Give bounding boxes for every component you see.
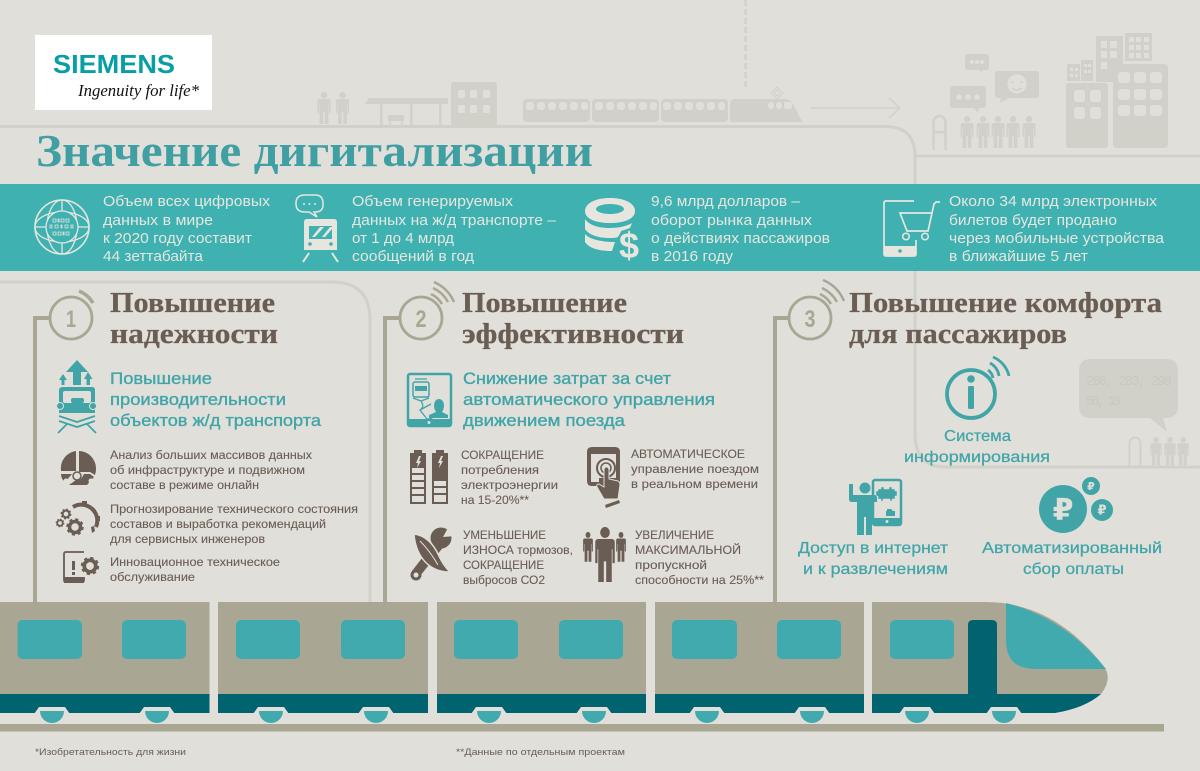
label: internet access: и к развлечениям	[803, 561, 948, 578]
heading: Повышение	[110, 288, 275, 319]
text: e-tickets: билетов будет продано	[949, 212, 1117, 229]
text: big data analysis: Анализ больших массивов данных	[110, 448, 312, 462]
icon: data coins with dollar	[585, 198, 639, 266]
icon: ruble coins: ₽	[1097, 502, 1107, 518]
subheading: движением поезда	[463, 412, 626, 430]
text: innovative maintenance: Инновационное техническое	[110, 555, 280, 569]
footnote 2: **Данные по отдельным проектам	[456, 747, 625, 758]
subheading: объектов ж/д транспорта	[110, 412, 322, 430]
number badge 2	[385, 282, 454, 603]
title: Значение дигитализации	[36, 126, 593, 176]
text: rail transport messages: Объем генерируемых	[352, 193, 514, 210]
icon: train with message bubble	[296, 195, 338, 262]
text: brake wear: ИЗНОСА тормозов,	[463, 543, 573, 557]
text: market turnover	[651, 193, 830, 265]
label: automated fare collection: сбор оплаты	[1023, 561, 1124, 578]
icon: pie chart	[61, 451, 96, 485]
label: internet access: Доступ в интернет	[798, 540, 949, 557]
background scene: passengers lower	[1130, 437, 1189, 466]
text: data volume: к 2020 году составит	[103, 230, 252, 247]
label: automated fare collection: Автоматизированный	[982, 540, 1162, 557]
text: rail transport messages: от 1 до 4 млрд	[352, 230, 454, 247]
icon: gears	[56, 501, 100, 534]
icon: train with up arrows	[56, 360, 96, 433]
text: condition forecast	[110, 502, 358, 546]
text: big data analysis: составе в режиме онлайн	[110, 478, 259, 492]
train cars	[0, 602, 864, 713]
text: automatic control: АВТОМАТИЧЕСКОЕ	[631, 447, 745, 461]
text: energy	[461, 448, 558, 507]
text: energy: электроэнергии	[461, 478, 558, 492]
heading	[849, 288, 1162, 350]
icon: person with tablet	[849, 480, 901, 535]
heading: Повышение комфорта	[849, 288, 1162, 319]
text: automatic control	[631, 447, 759, 491]
background scene: numbers bubble: 56, 18	[1086, 395, 1121, 410]
icon: batteries	[410, 450, 448, 504]
heading	[110, 288, 278, 350]
number badge 2: 2	[416, 306, 426, 333]
text: e-tickets: в ближайшие 5 лет	[949, 248, 1088, 265]
text: data volume: данных в мире	[103, 212, 213, 229]
icon: people capacity	[583, 527, 626, 582]
text: e-tickets: Около 34 млрд электронных	[949, 193, 1158, 210]
text: capacity: МАКСИМАЛЬНОЙ	[635, 542, 741, 557]
text: big data analysis: об инфраструктуре и подвижном	[110, 463, 305, 477]
icon: information system	[947, 357, 1009, 418]
text: e-tickets	[949, 193, 1165, 265]
text: market turnover: 9,6 млрд долларов –	[651, 193, 801, 210]
text: big data analysis	[110, 448, 312, 492]
logo: Ingenuity for life*	[77, 81, 199, 100]
label: information system: информирования	[904, 449, 1050, 466]
label: automated fare collection	[982, 540, 1162, 578]
heading	[462, 288, 684, 350]
text: automatic control: управление поездом	[631, 462, 759, 476]
icon: ruble coins	[1039, 477, 1113, 533]
text: brake wear	[463, 528, 573, 587]
panel: efficiency	[385, 282, 764, 603]
text: capacity	[635, 528, 764, 587]
text: data volume: 44 зеттабайта	[103, 248, 204, 265]
label: information system: Система	[944, 428, 1011, 445]
background scene: city buildings	[1066, 33, 1168, 148]
icon: phone with shopping cart	[884, 201, 940, 256]
text: brake wear: УМЕНЬШЕНИЕ	[463, 528, 546, 542]
subheading: Повышение	[110, 370, 212, 388]
train wheels	[34, 707, 1022, 723]
number badge 1	[35, 291, 93, 603]
text: capacity: способности на 25%**	[635, 573, 764, 587]
heading: для пассажиров	[849, 319, 1067, 350]
background scene: station	[318, 82, 497, 126]
text: energy: на 15-20%**	[461, 493, 529, 507]
panel: passenger comfort	[775, 280, 1162, 603]
footnote 1: *Изобретательность для жизни	[35, 747, 186, 758]
icon: ruble coins: ₽	[1053, 494, 1073, 527]
icon: data coins with dollar: $	[619, 225, 639, 266]
panel: key facts band	[0, 184, 1200, 271]
icon: globe with data	[35, 200, 89, 254]
text: automatic control: в реальном времени	[631, 477, 758, 491]
icon: tablet with train and operator	[408, 374, 451, 426]
text: condition forecast: для сервисных инженеров	[110, 532, 265, 546]
text: innovative maintenance	[110, 555, 280, 584]
text: market turnover: оборот рынка данных	[651, 212, 813, 229]
text: energy: СОКРАЩЕНИЕ	[461, 448, 544, 462]
train windows	[18, 620, 954, 659]
number badge 3: 3	[804, 306, 816, 333]
subheading	[463, 370, 715, 430]
text: data volume	[103, 193, 271, 265]
train	[0, 602, 1164, 732]
number badge 1: 1	[66, 306, 76, 333]
text: brake wear: выбросов СО2	[463, 573, 545, 587]
text: market turnover: о действиях пассажиров	[651, 230, 830, 247]
text: capacity: УВЕЛИЧЕНИЕ	[635, 528, 714, 542]
text: data volume: Объем всех цифровых	[103, 193, 271, 210]
subheading: автоматического управления	[463, 391, 715, 409]
label: information system	[904, 428, 1050, 466]
text: innovative maintenance: обслуживание	[110, 570, 195, 584]
panel: reliability	[35, 288, 358, 603]
icon: touch phone	[587, 447, 620, 508]
heading: эффективности	[462, 319, 684, 350]
logo: SIEMENS	[53, 49, 175, 79]
subheading	[110, 370, 322, 430]
text: condition forecast: Прогнозирование технического состояния	[110, 502, 358, 516]
label: internet access	[798, 540, 949, 578]
icon: ruble coins: ₽	[1087, 481, 1095, 493]
heading: Повышение	[462, 288, 627, 319]
text: rail transport messages: сообщений в год	[352, 248, 474, 265]
heading: надежности	[110, 319, 278, 350]
background scene: passengers and messages	[933, 54, 1039, 150]
background scene: numbers bubble	[1079, 359, 1178, 432]
train head	[872, 602, 1108, 713]
icon: wrench and leaf	[410, 526, 457, 580]
text: condition forecast: составов и выработка рекомендаций	[110, 517, 326, 531]
text: energy: потребления	[461, 463, 539, 477]
logo	[35, 35, 212, 110]
background scene: route lines	[0, 126, 1200, 603]
rail	[0, 724, 1164, 732]
text: rail transport messages	[352, 193, 557, 265]
text: brake wear: СОКРАЩЕНИЕ	[463, 558, 544, 572]
background scene: numbers bubble: 286, 283, 298	[1086, 375, 1172, 390]
text: e-tickets: через мобильные устройства	[949, 230, 1165, 247]
icon: tablet with gear	[64, 552, 98, 583]
text: capacity: пропускной	[635, 558, 707, 572]
subheading: Снижение затрат за счет	[463, 370, 671, 388]
text: rail transport messages: данных на ж/д транспорте –	[352, 212, 557, 229]
text: market turnover: в 2016 году	[651, 248, 734, 265]
subheading: производительности	[110, 391, 286, 409]
background scene: small train with arrow	[523, 0, 900, 122]
number badge 3	[775, 280, 844, 603]
